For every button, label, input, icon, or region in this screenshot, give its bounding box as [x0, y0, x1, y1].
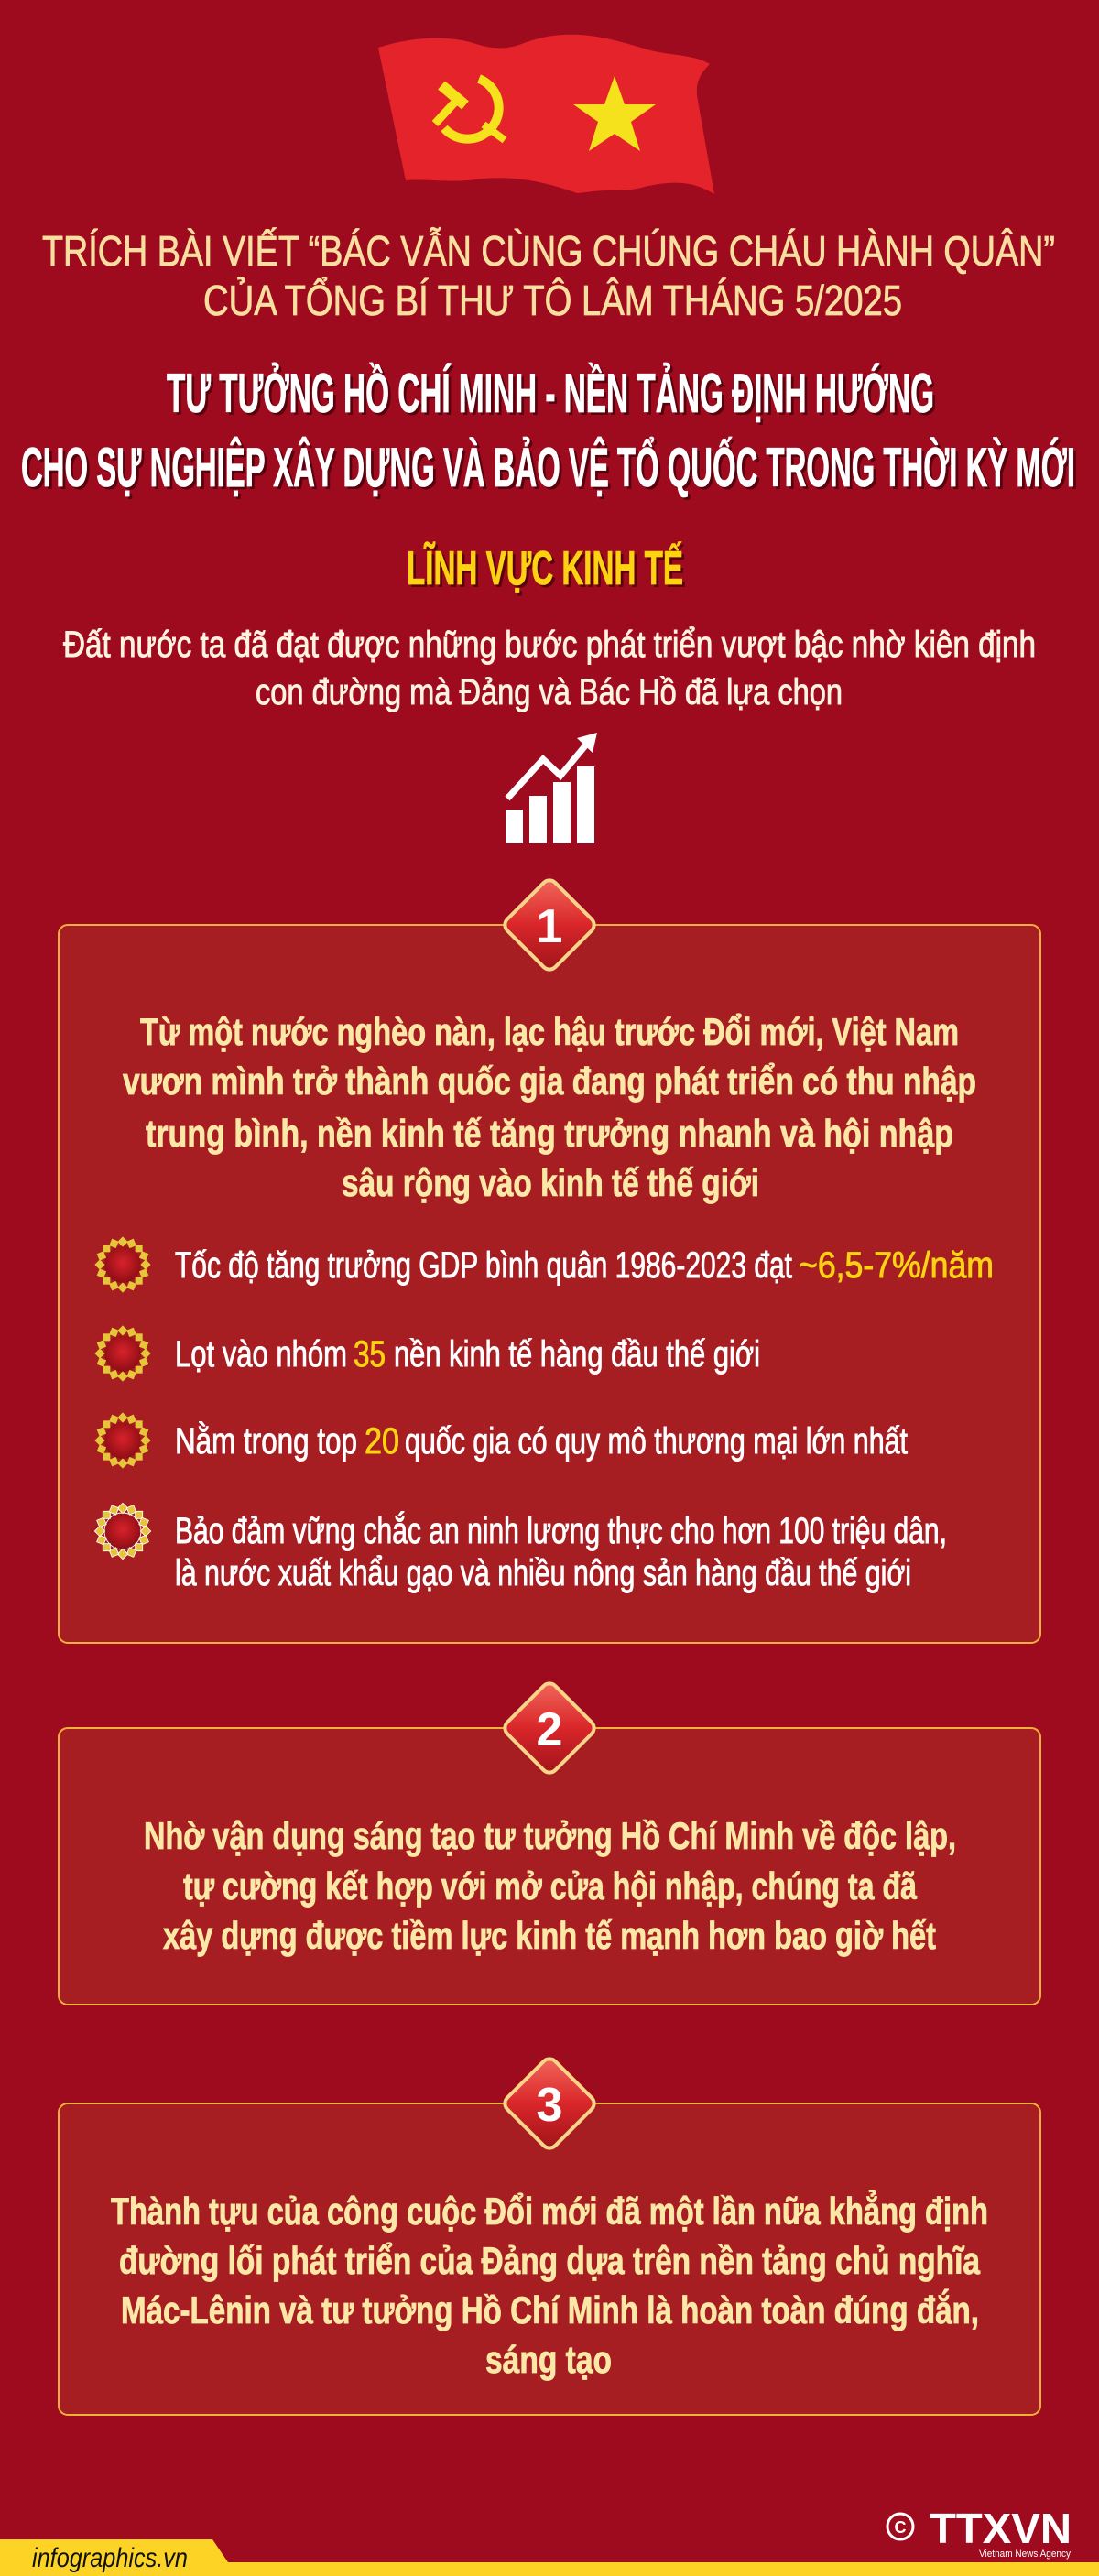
badge 3	[502, 2056, 597, 2151]
bullet 2: nền kinh tế hàng đầu thế giới	[394, 1334, 760, 1375]
panel 3 text: sáng tạo	[485, 2338, 612, 2381]
bullet 3: 20	[365, 1421, 399, 1462]
badge 2	[502, 1680, 597, 1776]
badge 1	[502, 877, 597, 973]
bullet 4	[94, 1503, 947, 1593]
bullet 1: Tốc độ tăng trưởng GDP bình quân 1986-2023 đạt	[175, 1245, 792, 1286]
badge 1: 1	[537, 900, 562, 953]
heading: economic field: LĨNH VỰC KINH TẾ	[407, 541, 683, 595]
intro text	[63, 625, 1036, 712]
bullet 3: quốc gia có quy mô thương mại lớn nhất	[405, 1421, 908, 1462]
logo: TTXVN: C	[894, 2518, 907, 2537]
icon: hammer and sickle	[435, 79, 505, 140]
subtitle	[42, 227, 1055, 324]
bullet 2	[94, 1325, 760, 1382]
bullet 2: 35	[354, 1334, 386, 1375]
footer band	[0, 2539, 1099, 2576]
flag	[378, 35, 714, 194]
bullet 3	[94, 1412, 908, 1469]
icon: star	[573, 76, 656, 151]
bullet 1	[94, 1236, 994, 1293]
logo: TTXVN: Vietnam News Agency	[979, 2549, 1071, 2560]
badge 2: 2	[537, 1703, 562, 1756]
logo: TTXVN	[887, 2505, 1072, 2560]
panel 1	[59, 877, 1040, 1643]
intro text: con đường mà Đảng và Bác Hồ đã lựa chọn	[256, 672, 843, 712]
bullet 3: Nằm trong top	[175, 1420, 357, 1462]
bullet 1: ~6,5-7%/năm	[799, 1245, 994, 1286]
panel 3 text	[111, 2188, 988, 2381]
panel 3	[59, 2056, 1040, 2415]
subtitle: CỦA TỔNG BÍ THƯ TÔ LÂM THÁNG 5/2025	[203, 277, 902, 324]
panel 2 text	[144, 1814, 956, 1957]
panel 1 lead text	[123, 1010, 976, 1204]
panel 1 lead text: sâu rộng vào kinh tế thế giới	[342, 1161, 759, 1204]
panel 2	[59, 1680, 1040, 2005]
bullet 2: Lọt vào nhóm	[175, 1334, 347, 1375]
footer: website: infographics.vn	[32, 2543, 188, 2573]
heading: economic field	[407, 541, 686, 598]
heading: economic field: LĨNH VỰC KINH TẾ	[409, 544, 686, 598]
title	[21, 363, 1078, 501]
badge 3: 3	[537, 2079, 562, 2132]
icon: growth chart	[506, 733, 597, 843]
logo: TTXVN: TTXVN	[930, 2505, 1072, 2552]
